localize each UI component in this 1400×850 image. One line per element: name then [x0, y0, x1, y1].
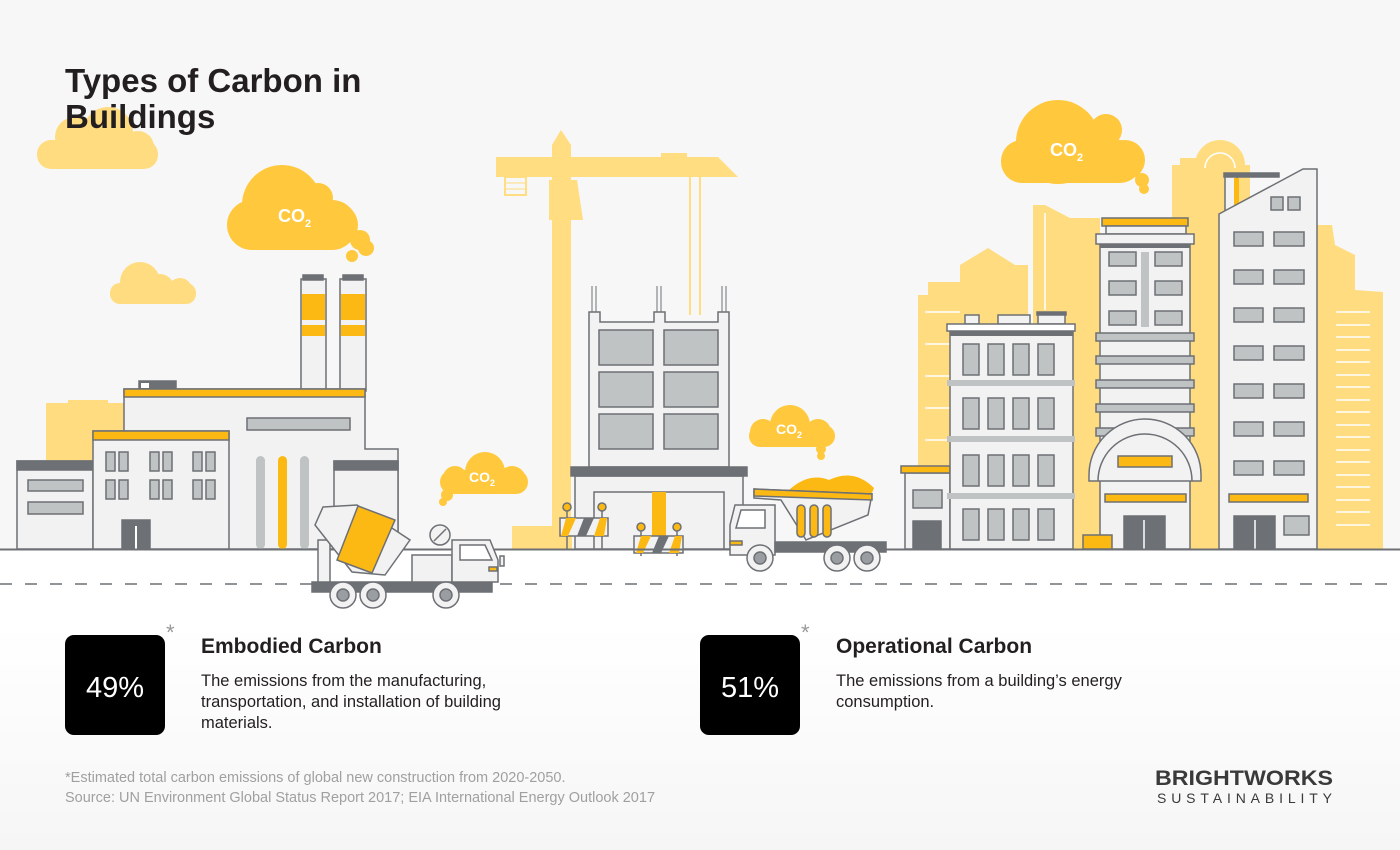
right background buildings	[918, 140, 1383, 549]
crane	[496, 130, 738, 549]
ground line and road	[0, 550, 1400, 584]
dump truck	[730, 476, 886, 571]
heading: operational carbon: Operational Carbon	[836, 635, 1032, 658]
cloud: CO2 right	[1001, 100, 1149, 194]
cloud: CO2 factory	[227, 165, 374, 262]
text: embodied description: The emissions from the manufacturing,	[201, 672, 486, 690]
logo: brightworks sustainability	[1155, 767, 1333, 806]
box: 51%	[700, 620, 810, 735]
title	[65, 62, 361, 135]
logo: brightworks sustainability: BRIGHTWORKS	[1155, 767, 1333, 790]
cloud: CO2 right: 2	[1077, 152, 1083, 164]
stat: embodied carbon	[65, 620, 501, 735]
cement mixer truck	[312, 505, 504, 608]
cloud: CO2 right: CO	[1050, 140, 1077, 160]
cloud: pale small	[110, 262, 196, 304]
cloud: CO2 small near mixer	[439, 452, 528, 506]
cloud: CO2 small near mixer: CO	[469, 469, 490, 485]
footnote: *Estimated total carbon emissions of global new construction from 2020-2050.	[65, 770, 566, 786]
box: 49%: 49%	[86, 672, 144, 704]
cloud: CO2 factory: CO	[278, 206, 305, 226]
text: embodied description: transportation, and installation of building	[201, 693, 501, 711]
construction building	[571, 286, 747, 549]
building C	[1219, 169, 1317, 549]
cloud: CO2 center	[749, 405, 835, 460]
stat: operational carbon	[700, 620, 1123, 735]
heading: embodied carbon: Embodied Carbon	[201, 635, 382, 658]
building B	[1083, 218, 1201, 549]
title: Buildings	[65, 98, 215, 135]
footnote: Source: UN Environment Global Status Report 2017; EIA International Energy Outlook 2017	[65, 790, 655, 806]
logo: brightworks sustainability: SUSTAINABILITY	[1157, 790, 1333, 806]
box: 49%	[65, 620, 175, 735]
box: 49%: *	[166, 620, 175, 645]
text: operational description: consumption.	[836, 693, 934, 711]
box: 51%: *	[801, 620, 810, 645]
cloud: CO2 factory: 2	[305, 218, 311, 230]
cloud: CO2 small near mixer: 2	[490, 478, 495, 488]
cloud: pale top-left	[37, 107, 158, 169]
text: operational description: The emissions from a building’s energy	[836, 672, 1123, 690]
cloud: CO2 center: CO	[776, 421, 797, 437]
building A	[947, 312, 1075, 549]
building: small left	[901, 466, 950, 549]
title: Types of Carbon in	[65, 62, 361, 99]
factory	[17, 275, 398, 549]
barriers	[560, 503, 683, 556]
text: embodied description: materials.	[201, 714, 273, 732]
box: 51%: 51%	[721, 672, 779, 704]
cloud: CO2 center: 2	[797, 430, 802, 440]
